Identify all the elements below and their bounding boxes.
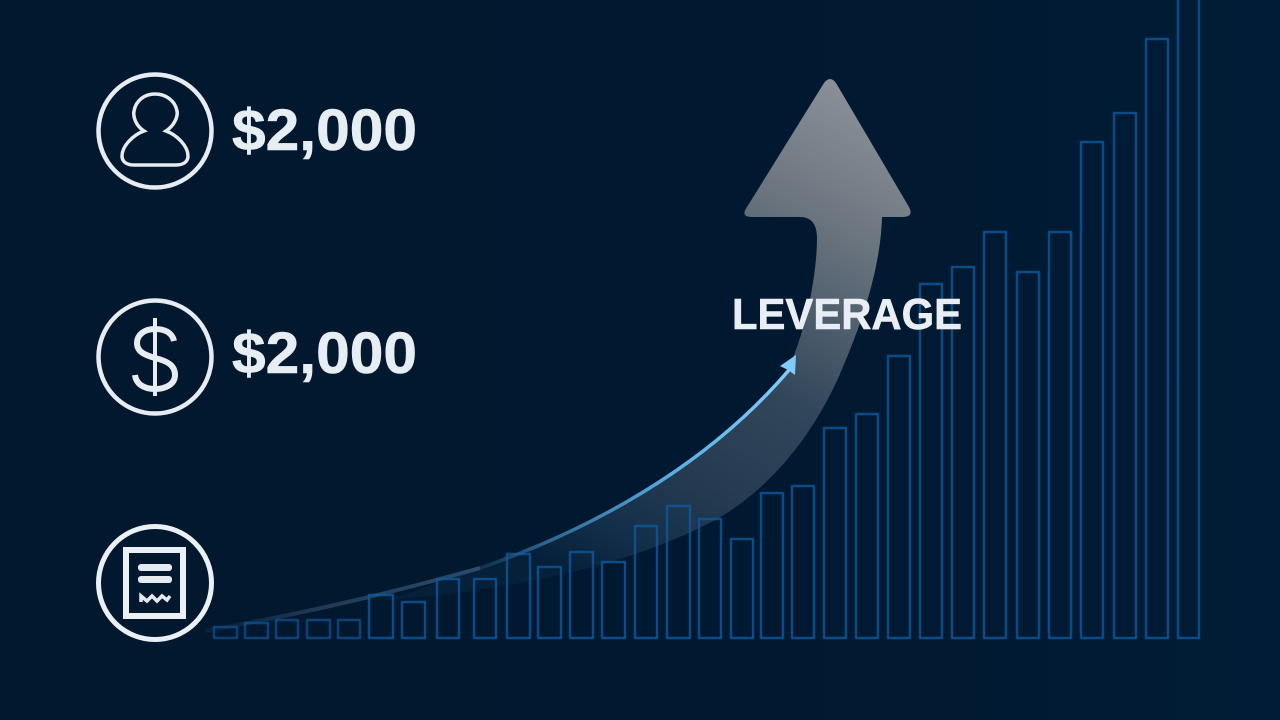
arrow: large leverage growth arrow bbox=[205, 79, 911, 631]
amount: first $2,000: $2,000 bbox=[232, 98, 417, 163]
icon: person in circle bbox=[98, 74, 212, 188]
amount: second $2,000: $2,000 bbox=[232, 321, 417, 386]
icon: dollar in circle bbox=[98, 300, 212, 414]
label: LEVERAGE: LEVERAGE bbox=[732, 290, 962, 339]
icon: document in circle bbox=[98, 526, 212, 640]
bar chart bbox=[214, 0, 1199, 638]
curved light blue arrow bbox=[440, 355, 796, 581]
arrow tail bbox=[205, 568, 480, 631]
